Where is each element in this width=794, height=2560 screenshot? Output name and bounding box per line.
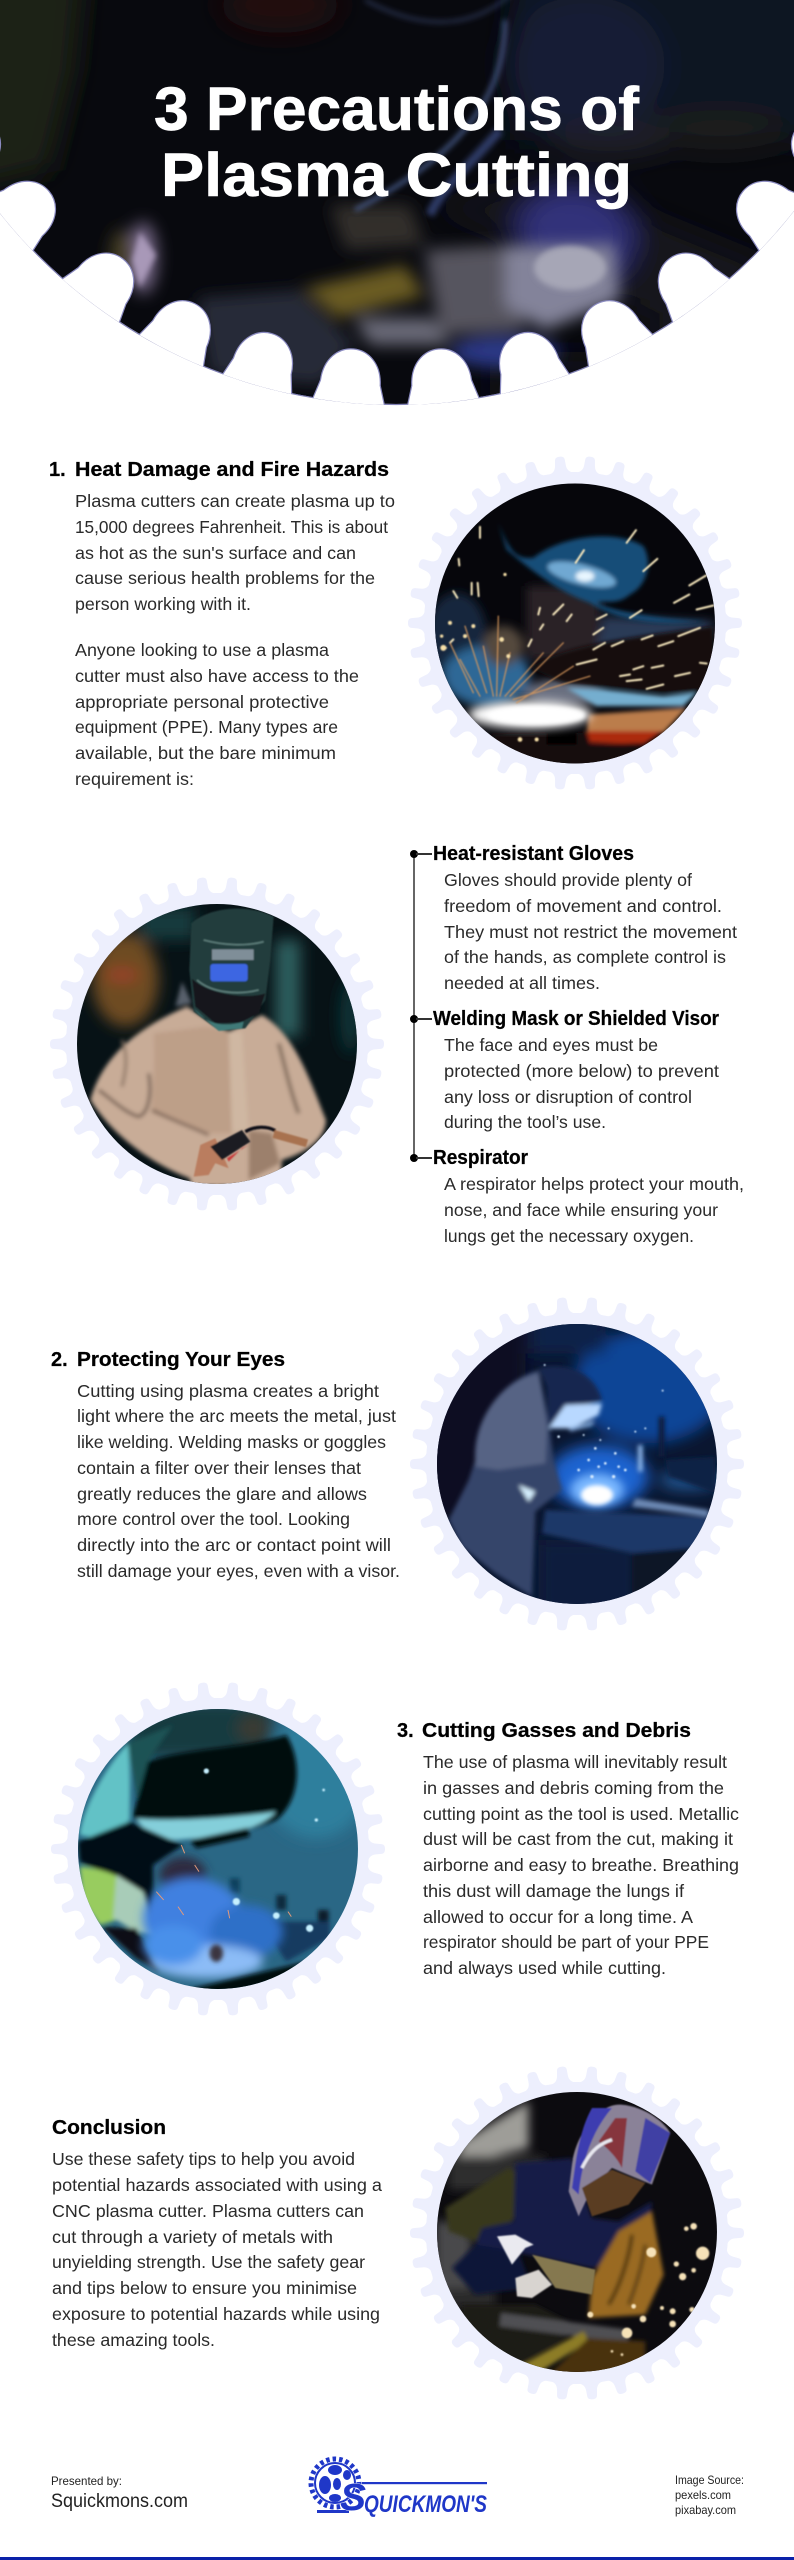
- paragraph 2: available, but the bare minimum: [75, 743, 336, 763]
- photo: welder in stars and stripes helmet: [432, 2088, 722, 2378]
- paragraph 2: appropriate personal protective: [75, 692, 329, 712]
- logo wordmark: S: [340, 2477, 366, 2519]
- conclusion paragraph: potential hazards associated with using a: [52, 2175, 382, 2195]
- paragraph 2: equipment (PPE). Many types are: [75, 717, 338, 737]
- logo rule: [362, 2482, 487, 2484]
- paragraph: still damage your eyes, even with a visor.: [77, 1561, 400, 1581]
- image source: pexels.com: [675, 2488, 731, 2502]
- item: respirator: [433, 1147, 744, 1246]
- image source: pixabay.com: [675, 2503, 736, 2517]
- logo: [311, 2459, 487, 2519]
- section: PPE list with photo: [35, 843, 744, 1246]
- bottom bar: [0, 2557, 794, 2560]
- item: respirator: Respirator: [433, 1147, 528, 1169]
- gear outline behind tips: [0, 0, 794, 404]
- gear backdrop 2: [35, 862, 399, 1226]
- conclusion paragraph: exposure to potential hazards while using: [52, 2304, 380, 2324]
- conclusion paragraph: these amazing tools.: [52, 2330, 215, 2350]
- logo gear: [311, 2459, 359, 2507]
- item: heat-resistant gloves: of the hands, as complete control is: [444, 947, 726, 967]
- presented by: [51, 2474, 188, 2512]
- conclusion paragraph: [52, 2149, 382, 2350]
- section 1: heat damage and fire hazards: [50, 456, 742, 790]
- photo: sparks and welding visor: [427, 480, 720, 769]
- gear notches: [0, 98, 794, 423]
- title: 3 Precautions of: [154, 75, 640, 143]
- item: welding mask or shielded visor: during the tool’s use.: [444, 1112, 606, 1132]
- photo: cutting with blue smoke: [78, 1709, 358, 1989]
- heading 2: Protecting Your Eyes: [77, 1349, 285, 1371]
- item: welding mask or shielded visor: [433, 1008, 719, 1132]
- paragraph 1: person working with it.: [75, 594, 251, 614]
- logo wordmark: QUICKMON'S: [364, 2491, 487, 2518]
- paragraph 1: Plasma cutters can create plasma up to: [75, 491, 395, 511]
- paragraph: [423, 1752, 739, 1978]
- title: [154, 75, 640, 209]
- paragraph: contain a filter over their lenses that: [77, 1458, 361, 1478]
- gear backdrop 3: [395, 1282, 759, 1646]
- conclusion section: [52, 2066, 744, 2400]
- paragraph: greatly reduces the glare and allows: [77, 1484, 367, 1504]
- heading 3: 3.: [397, 1720, 414, 1742]
- item: welding mask or shielded visor: protected (more below) to prevent: [444, 1061, 719, 1081]
- section 2: protecting your eyes: [52, 1298, 744, 1630]
- item: heat-resistant gloves: freedom of movement and control.: [444, 896, 722, 916]
- paragraph: like welding. Welding masks or goggles: [77, 1432, 386, 1452]
- paragraph 1: as hot as the sun's surface and can: [75, 543, 356, 563]
- item: welding mask or shielded visor: Welding Mask or Shielded Visor: [433, 1008, 719, 1030]
- item: welding mask or shielded visor: The face and eyes must be: [444, 1035, 658, 1055]
- photo: welder in blue light: [437, 1324, 717, 1604]
- paragraph: airborne and easy to breathe. Breathing: [423, 1855, 739, 1875]
- item: welding mask or shielded visor: any loss or disruption of control: [444, 1087, 692, 1107]
- photo: worker in welding helmet: [72, 900, 362, 1190]
- paragraph: cutting point as the tool is used. Metallic: [423, 1804, 739, 1824]
- conclusion paragraph: cut through a variety of metals with: [52, 2227, 333, 2247]
- item: respirator: lungs get the necessary oxygen.: [444, 1226, 694, 1246]
- presented by: Squickmons.com: [51, 2491, 188, 2512]
- paragraph: and always used while cutting.: [423, 1958, 666, 1978]
- gear backdrop 5: [395, 2051, 759, 2415]
- header: gear-shaped photo banner: [0, 0, 794, 423]
- timeline line and markers: [410, 850, 432, 1162]
- paragraph: light where the arc meets the metal, just: [77, 1406, 396, 1426]
- paragraph: dust will be cast from the cut, making it: [423, 1829, 733, 1849]
- conclusion paragraph: CNC plasma cutter. Plasma cutters can: [52, 2201, 364, 2221]
- paragraph 1: 15,000 degrees Fahrenheit. This is about: [75, 517, 388, 537]
- image source: Image Source:: [675, 2473, 744, 2487]
- paragraph: The use of plasma will inevitably result: [423, 1752, 727, 1772]
- paragraph: directly into the arc or contact point will: [77, 1535, 391, 1555]
- paragraph 1: [75, 491, 395, 614]
- item: respirator: A respirator helps protect your mouth,: [444, 1174, 744, 1194]
- gear backdrop 4: [36, 1667, 400, 2031]
- item: heat-resistant gloves: needed at all times.: [444, 973, 600, 993]
- title: Plasma Cutting: [161, 141, 632, 209]
- item: heat-resistant gloves: They must not restrict the movement: [444, 922, 737, 942]
- paragraph: in gasses and debris coming from the: [423, 1778, 724, 1798]
- paragraph 2: cutter must also have access to the: [75, 666, 359, 686]
- paragraph: this dust will damage the lungs if: [423, 1881, 684, 1901]
- paragraph: allowed to occur for a long time. A: [423, 1907, 693, 1927]
- section 3: cutting gasses and debris: [51, 1682, 738, 2016]
- item: heat-resistant gloves: Gloves should provide plenty of: [444, 870, 692, 890]
- paragraph: Cutting using plasma creates a bright: [77, 1381, 379, 1401]
- paragraph: respirator should be part of your PPE: [423, 1932, 709, 1952]
- conclusion paragraph: Use these safety tips to help you avoid: [52, 2149, 355, 2169]
- heading 1: 1.: [49, 459, 66, 481]
- gear backdrop 1: [393, 441, 757, 805]
- paragraph: more control over the tool. Looking: [77, 1509, 350, 1529]
- paragraph 2: [75, 640, 359, 789]
- heading 2: 2.: [51, 1349, 68, 1371]
- conclusion paragraph: and tips below to ensure you minimise: [52, 2278, 357, 2298]
- presented by: Presented by:: [51, 2474, 122, 2488]
- conclusion heading: Conclusion: [52, 2117, 166, 2139]
- item: heat-resistant gloves: Heat-resistant Gloves: [433, 843, 634, 865]
- heading 3: Cutting Gasses and Debris: [422, 1720, 691, 1742]
- paragraph: [77, 1381, 400, 1581]
- item: heat-resistant gloves: [433, 843, 737, 993]
- paragraph 2: requirement is:: [75, 769, 194, 789]
- item: respirator: nose, and face while ensuring your: [444, 1200, 718, 1220]
- header photo: [0, 0, 794, 420]
- image source: [675, 2473, 744, 2517]
- paragraph 2: Anyone looking to use a plasma: [75, 640, 329, 660]
- footer: [51, 2459, 744, 2519]
- logo wordmark: [317, 2477, 487, 2519]
- paragraph 1: cause serious health problems for the: [75, 568, 375, 588]
- conclusion paragraph: unyielding strength. Use the safety gear: [52, 2252, 365, 2272]
- heading 1: Heat Damage and Fire Hazards: [75, 459, 389, 481]
